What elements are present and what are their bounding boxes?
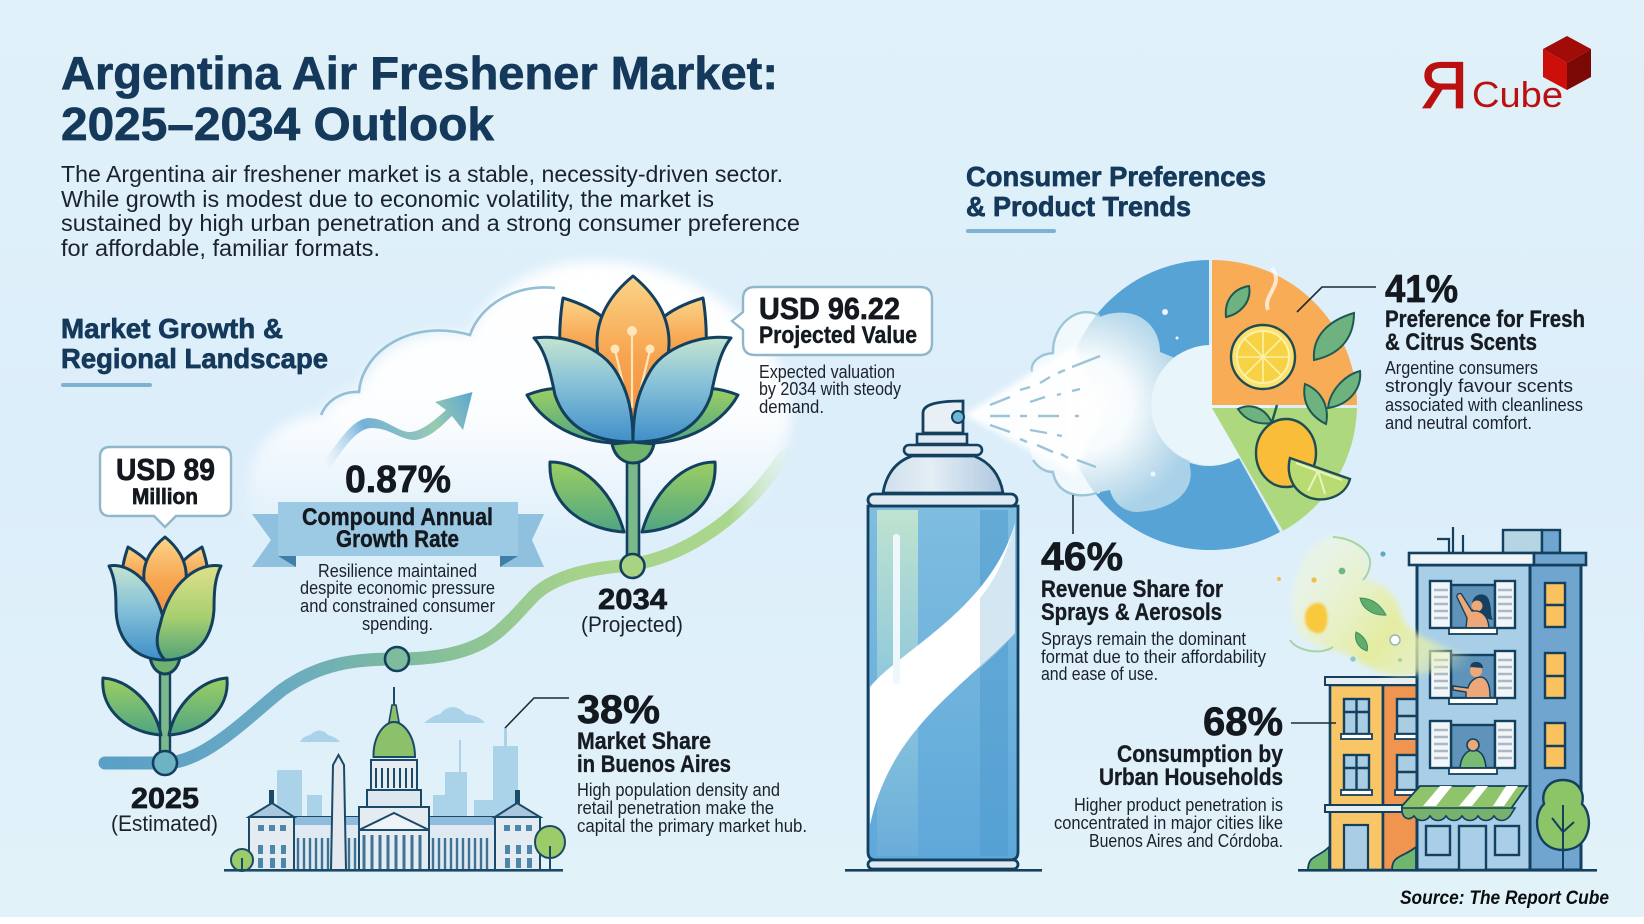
stat: 68%: concentrated in major cities like: [1054, 813, 1283, 833]
stat: 68%: Consumption by: [1117, 741, 1284, 768]
tall building: [1298, 527, 1597, 872]
cloud backdrop: [248, 262, 790, 540]
stat: 0.87%: Growth Rate: [336, 526, 459, 553]
stem and leaves: [103, 657, 227, 755]
spray cone: [965, 345, 1100, 475]
arrow: growth: [325, 392, 472, 470]
source note: Source: The Report Cube: [1400, 888, 1609, 909]
callout line: 46%: [1072, 495, 1074, 534]
stat: 41%: 41%: [1385, 268, 1458, 311]
stat: 46%: 46%: [1041, 535, 1123, 579]
back leaves: [527, 388, 738, 443]
title: Argentina Air Freshener Market:: [61, 47, 778, 99]
stat: 0.87%: 0.87%: [345, 459, 451, 501]
nozzle: [904, 401, 982, 455]
stat: 68%: Urban Households: [1099, 764, 1283, 791]
skyline: [277, 707, 518, 832]
trees: [231, 826, 565, 871]
illustration: congress building and skyline: [224, 687, 565, 872]
label: 2034: 2034: [598, 584, 667, 616]
bubble: USD 89: USD 89: [116, 452, 215, 487]
title: 2025–2034 Outlook: [61, 98, 494, 150]
stat: 0.87%: despite economic pressure: [300, 578, 495, 598]
node 2034: [620, 554, 644, 578]
pavilions: [249, 790, 540, 870]
stat: 41%: strongly favour scents: [1385, 376, 1573, 396]
stat: 38%: capital the primary market hub.: [577, 816, 807, 836]
stat: 46%: Sprays remain the dominant: [1041, 629, 1246, 649]
mist cloud outline: [1032, 312, 1100, 495]
heading: market growth: Regional Landscape: [61, 343, 328, 374]
stat: 41%: & Citrus Scents: [1385, 329, 1537, 356]
growth curve: [105, 455, 785, 763]
wisp: [1267, 268, 1276, 310]
intro text: sustained by high urban penetration and a strong consumer preference: [61, 210, 800, 236]
intro text: While growth is modest due to economic volatility, the market is: [61, 186, 714, 212]
logo: RCube: [1420, 36, 1591, 122]
window: resident waving: [1430, 581, 1515, 634]
rings: [868, 494, 1017, 506]
title: [61, 47, 778, 150]
stat: 68%: Buenos Aires and Córdoba.: [1089, 831, 1283, 851]
stat: 41%: associated with cleanliness: [1385, 395, 1583, 415]
stat: 0.87%: Compound Annual: [302, 504, 493, 531]
intro text: for affordable, familiar formats.: [61, 235, 380, 261]
stat: 38%: in Buenos Aires: [577, 751, 731, 778]
awning: [1402, 786, 1527, 820]
stat: 41%: and neutral comfort.: [1385, 413, 1532, 433]
heading: consumer preferences: [966, 161, 1266, 233]
blue petals: [534, 337, 731, 442]
stat: 41%: [1385, 268, 1585, 433]
stat: 41%: Argentine consumers: [1385, 358, 1538, 378]
ribbon: [252, 502, 544, 567]
bubble: USD 89: [100, 447, 231, 527]
label: 2034: (Projected): [581, 612, 683, 637]
stat: 46%: [1041, 535, 1266, 684]
stat: 0.87%: spending.: [362, 614, 433, 634]
side windows: [1545, 583, 1565, 768]
label: 2034: [581, 584, 683, 637]
stat: 38%: retail penetration make the: [577, 798, 774, 818]
heading: consumer preferences: Consumer Preferences: [966, 161, 1266, 192]
citrus illustration: [1226, 268, 1360, 499]
heading: market growth: [61, 313, 328, 387]
logo: RCube: Я: [1420, 48, 1468, 122]
lime wedge: [1289, 458, 1350, 499]
mist over ring: [1078, 312, 1191, 512]
node 2025: [153, 751, 177, 775]
mist cloud backing: [1020, 312, 1100, 495]
decorative dots: [1150, 309, 1178, 476]
stat: 68%: [1054, 700, 1284, 851]
label: 2025: (Estimated): [111, 811, 218, 836]
text: expected valuation: [759, 362, 901, 417]
bubble: USD 96.22: USD 96.22: [759, 291, 900, 326]
intro text: The Argentina air freshener market is a stable, necessity-driven sector.: [61, 161, 783, 187]
dome: [883, 456, 1003, 493]
small building: [1308, 677, 1417, 870]
stat: 68%: Higher product penetration is: [1074, 795, 1283, 815]
stat: 46%: and ease of use.: [1041, 664, 1158, 684]
bubble: USD 96.22: [732, 287, 932, 355]
spray can: [845, 401, 1042, 872]
stat: 38%: [577, 688, 807, 836]
obelisk: [331, 755, 346, 870]
segment: green: [1212, 408, 1357, 531]
label: 2025: 2025: [131, 783, 199, 815]
bubble: USD 96.22: Projected Value: [759, 322, 917, 349]
bushes: [1308, 847, 1416, 870]
text: expected valuation: by 2034 with steody: [759, 379, 901, 399]
leaves: [1226, 286, 1360, 424]
stem and leaves: [550, 458, 715, 556]
stat: 46%: Sprays & Aerosols: [1041, 599, 1222, 626]
heading: market growth: Market Growth &: [61, 313, 283, 344]
scent plume: [1277, 537, 1470, 676]
window: resident spraying: [1430, 651, 1515, 704]
stat: 0.87%: and constrained consumer: [300, 596, 495, 616]
stat: 38%: High population density and: [577, 780, 780, 800]
lemon: [1256, 419, 1316, 487]
intro text: [61, 161, 800, 261]
ground floor: [1426, 826, 1519, 870]
stat: 38%: Market Share: [577, 728, 711, 755]
callout line: 68%: [1291, 722, 1336, 724]
can body: [868, 506, 1018, 860]
small flower 2025: [103, 537, 227, 755]
text: expected valuation: demand.: [759, 397, 824, 417]
orange petals: [560, 276, 706, 430]
stat: 38%: 38%: [577, 688, 660, 732]
windows: [1344, 699, 1417, 790]
stat: 46%: format due to their affordability: [1041, 647, 1266, 667]
segment: orange 41%: [1212, 260, 1357, 405]
hole: [1151, 345, 1271, 465]
tree: [1537, 780, 1589, 870]
heading: consumer preferences: & Product Trends: [966, 191, 1191, 222]
logo: RCube: Cube: [1472, 74, 1563, 115]
stat: 0.87%: Resilience maintained: [318, 561, 477, 581]
stat: 0.87%: [252, 459, 544, 634]
callout line: 41%: [1297, 287, 1376, 312]
stat: 68%: 68%: [1203, 700, 1283, 744]
petals: [109, 537, 221, 660]
stat: 41%: Preference for Fresh: [1385, 306, 1585, 333]
bubble: USD 89: Million: [132, 484, 198, 509]
wings: [294, 817, 495, 870]
callout line: 38%: [505, 698, 569, 728]
stat: 46%: Revenue Share for: [1041, 576, 1223, 603]
segment: blue 46%: [1065, 260, 1280, 550]
window: resident at rest: [1430, 721, 1515, 774]
lemon slice: [1231, 325, 1295, 389]
central block and dome: [359, 687, 429, 870]
donut chart: [1020, 260, 1357, 550]
label: 2025: [111, 783, 218, 836]
text: expected valuation: Expected valuation: [759, 362, 895, 382]
node mid: [385, 647, 409, 671]
large flower 2034: [527, 276, 738, 556]
